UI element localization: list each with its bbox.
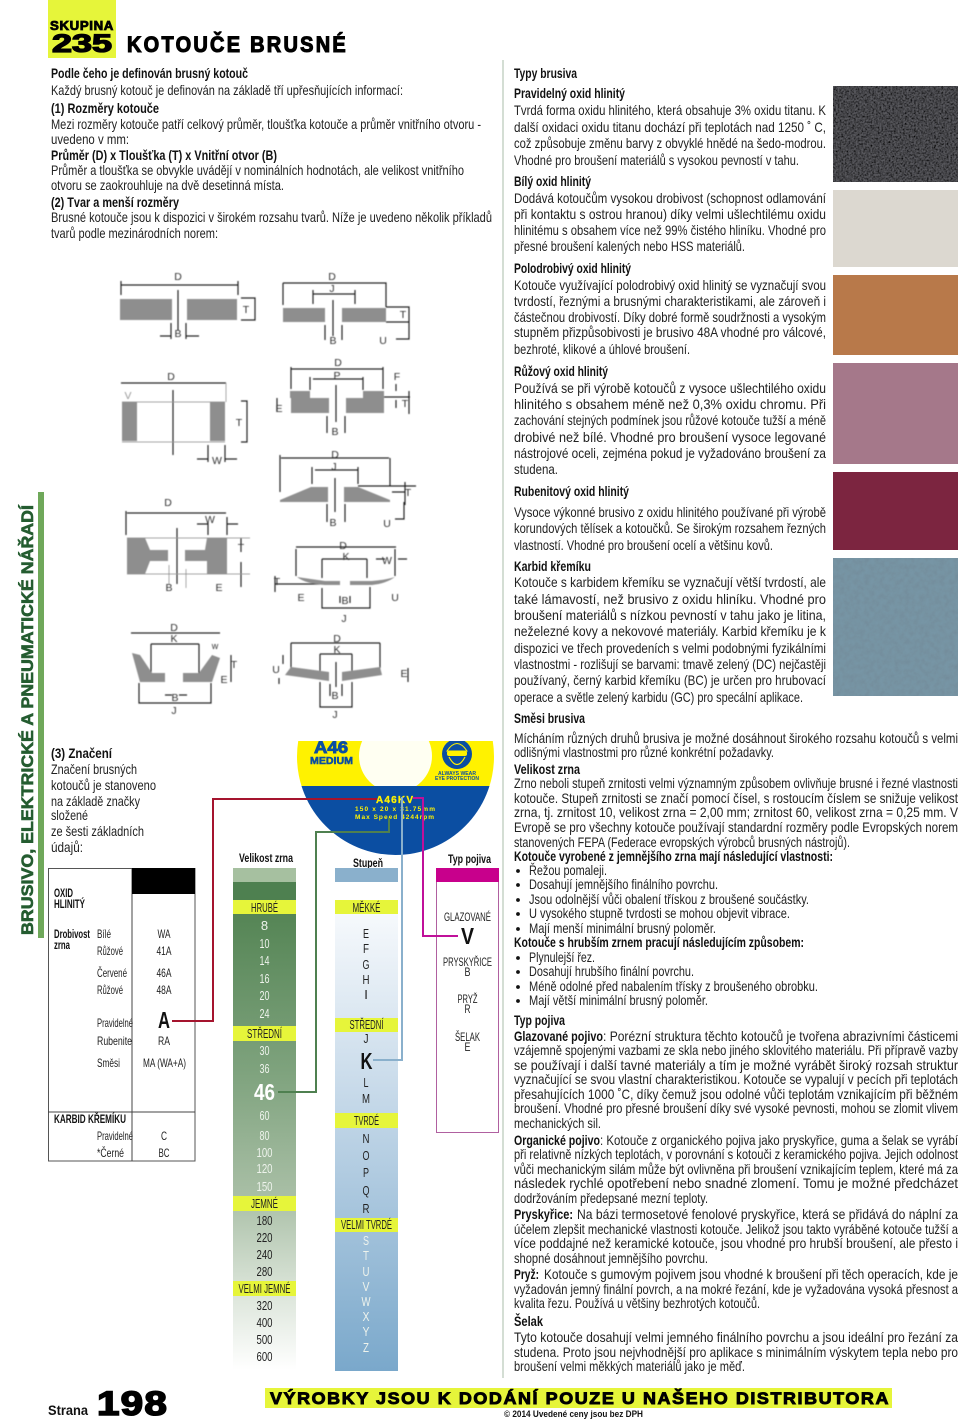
highlighted grade K: K bbox=[360, 1048, 373, 1074]
diagram: flaring cup wheel: T bbox=[231, 659, 238, 671]
text block: definition of a grinding wheel: (2) Tvar a menší rozměry bbox=[51, 194, 179, 210]
paragraph: semi-friable aluminium oxide: bezhroté, klikové a úhlové broušení. bbox=[514, 341, 690, 357]
column: grain size: 120 bbox=[256, 1161, 272, 1176]
column: grain size: 16 bbox=[260, 971, 270, 986]
text block: abrasive types bbox=[514, 65, 827, 705]
paragraph: semi-friable aluminium oxide: Polodrobivý oxid hlinitý bbox=[514, 260, 631, 276]
diagram: tapered wheel bbox=[280, 449, 416, 530]
table: abrasive types: Růžové bbox=[97, 983, 123, 997]
column: grain size: 280 bbox=[256, 1264, 272, 1279]
column: bond type: R bbox=[464, 1002, 471, 1016]
paragraph: regular aluminium oxide: Tvrdá forma oxidu hlinitého, která obsahuje 3% oxidu titanu. K bbox=[514, 102, 827, 118]
column: grade: H bbox=[362, 972, 370, 987]
column: grade: S bbox=[363, 1233, 369, 1248]
diagram: depressed center wheel: K bbox=[333, 644, 341, 656]
text block: definition of a grinding wheel: Každý brusný kotouč je definován na základě tří upřesňujících informací: bbox=[51, 82, 403, 98]
paragraph: shellac bbox=[514, 1312, 958, 1374]
column: grade: L bbox=[364, 1075, 368, 1090]
paragraph: rubenite aluminium oxide: Rubenitový oxid hlinitý bbox=[514, 483, 629, 499]
column: grain size: 240 bbox=[256, 1247, 272, 1262]
column: bond type bbox=[436, 852, 499, 1132]
table: abrasive types: RA bbox=[158, 1034, 170, 1048]
diagram: flaring cup wheel: K bbox=[170, 633, 178, 645]
paragraph: silicon carbide: vlastnostmi - rozlišují se barvami: tmavě zelený (DC) nejčastěji bbox=[514, 656, 826, 672]
column: grain size: HRUBÉ bbox=[251, 900, 278, 915]
paragraph: white aluminium oxide: přesné broušení kalených nebo HSS materiálů. bbox=[514, 238, 745, 254]
table heading: aluminium oxide: HLINITÝ bbox=[54, 896, 85, 911]
table: abrasive types: BC bbox=[158, 1146, 170, 1160]
table: abrasive types: Směsi bbox=[97, 1056, 120, 1070]
diagram: double recessed wheel: D bbox=[164, 497, 172, 509]
disc text: grain designation: A46 bbox=[314, 738, 348, 757]
diagram: double recessed wheel: T bbox=[238, 542, 245, 554]
column: grain size: Velikost zrna bbox=[239, 851, 293, 865]
text block: (3) marking: údajů: bbox=[51, 839, 83, 855]
disc text: specification: Max Speed 4244rpm bbox=[355, 814, 434, 821]
sidebar: vertical section label: BRUSIVO, ELEKTRICKÉ A PNEUMATICKÉ NÁŘADÍ bbox=[18, 504, 37, 935]
diagram: recessed both sides wheel: D bbox=[334, 357, 342, 369]
column: grain size: 600 bbox=[256, 1349, 272, 1364]
column: grade: Stupeň bbox=[353, 856, 383, 870]
text block: definition of a grinding wheel: Mezi rozměry kotouče patří celkový průměr, tloušťka kotouče a průměr vnitřního otvoru - bbox=[51, 116, 481, 132]
column: grain size: 20 bbox=[260, 988, 270, 1003]
disc text: eye protection notice bbox=[435, 771, 479, 782]
text block: definition of a grinding wheel: Průměr a tloušťka se obvykle uvádějí v nominálních hodnotách, ale velikost vnitřního bbox=[51, 162, 464, 178]
paragraph: rubenite aluminium oxide: vlastností. Vhodné pro broušení ocelí a většinu kovů. bbox=[514, 537, 773, 553]
table: abrasive types: Bílé bbox=[97, 927, 111, 941]
list: finer grain properties: Jsou odolnější vůči obalení třískou z broušené součástky. bbox=[529, 891, 809, 907]
connector: grade K to label bbox=[373, 797, 402, 1060]
text block: (3) marking: ze šesti základních bbox=[51, 823, 144, 839]
column: bond type: GLAZOVANÉ bbox=[444, 909, 491, 924]
diagram: dish wheel with flange: K bbox=[342, 551, 350, 563]
text block: (3) marking: složené bbox=[51, 807, 88, 823]
disc text: eye protection notice: ALWAYS WEAR bbox=[438, 771, 476, 777]
paragraph: white aluminium oxide: při kontaktu s ostrou hranou) díky velmi ušlechtilému oxidu bbox=[514, 206, 826, 222]
header: group badge: SKUPINA bbox=[50, 19, 114, 33]
table heading: aluminium oxide: zrna bbox=[54, 938, 70, 952]
text block: (3) marking: na základě značky bbox=[51, 793, 140, 809]
text block: abrasive mixtures: Směsi brusiva bbox=[514, 710, 585, 726]
diagram: recessed wheel: U bbox=[379, 335, 387, 347]
text block: definition of a grinding wheel: tvarů podle mezinárodních norem: bbox=[51, 225, 218, 241]
list: coarser grain properties: Plynulejší řez. bbox=[529, 949, 595, 965]
column: grade: X bbox=[362, 1309, 370, 1324]
diagram: recessed wheel: J bbox=[329, 283, 335, 295]
table: abrasive types bbox=[48, 868, 195, 1161]
list: finer grain properties bbox=[514, 848, 833, 936]
column: grade: N bbox=[362, 1131, 370, 1146]
paragraph: semi-friable aluminium oxide: stupněm přizpůsobivosti je brusivo 48A vhodné pro válcové, bbox=[514, 324, 826, 340]
paragraph: pink aluminium oxide: Používá se při výrobě kotoučů z vysoce ušlechtilého oxidu bbox=[514, 380, 826, 396]
column: bond type: PRYSKYŘICE bbox=[443, 954, 492, 969]
column: grade: Q bbox=[362, 1183, 370, 1198]
paragraph: organic bond: Organické pojivo bbox=[514, 1132, 600, 1148]
diagram: dish wheel with flange: T bbox=[274, 576, 281, 588]
paragraph: vitrified bond: mechanických sil. bbox=[514, 1115, 601, 1131]
sidebar: vertical section label bbox=[18, 492, 44, 938]
diagram: depressed center wheel: E bbox=[400, 668, 408, 680]
list: finer grain properties: Kotouče vyrobené z jemnějšího zrna mají následující vlastnosti: bbox=[514, 848, 833, 864]
column: bond type: E bbox=[464, 1040, 470, 1054]
paragraph: white aluminium oxide bbox=[514, 173, 826, 254]
column: grade: Z bbox=[363, 1340, 369, 1355]
paragraph: pink aluminium oxide bbox=[514, 363, 826, 477]
footer: copyright: © 2014 Uvedené ceny jsou bez DPH bbox=[504, 1409, 643, 1419]
diagram: straight wheel bbox=[120, 271, 255, 340]
column: grade: E bbox=[363, 926, 369, 941]
column: grain size: 10 bbox=[260, 936, 270, 951]
paragraph: silicon carbide: Kotouče s karbidem křemíku se vyznačují větší tvrdostí, ale bbox=[514, 574, 826, 590]
column: grain size: 60 bbox=[260, 1108, 270, 1123]
column: grain size: 150 bbox=[256, 1179, 272, 1194]
text block: definition of a grinding wheel bbox=[51, 65, 492, 241]
paragraph: resin: Pryskyřice: bbox=[514, 1206, 573, 1222]
diagram: flaring cup wheel: w bbox=[211, 641, 219, 651]
heading: abrasive types: Typy brusiva bbox=[514, 65, 577, 81]
highlighted grain value 46: 46 bbox=[254, 1079, 275, 1105]
column: grade: VELMI TVRDÉ bbox=[341, 1217, 392, 1232]
marking letter A: A bbox=[158, 1007, 170, 1033]
paragraph: organic bond bbox=[514, 1132, 958, 1206]
paragraph: pink aluminium oxide: drobivé než bílé. Vhodné pro broušení vysoce legované bbox=[514, 429, 826, 445]
column: grade: J bbox=[364, 1031, 368, 1046]
column: grain size: 36 bbox=[260, 1061, 270, 1076]
text block: (3) marking bbox=[51, 745, 156, 855]
diagram: straight wheel: D bbox=[174, 271, 182, 283]
diagram: cylinder wheel: V bbox=[124, 390, 132, 402]
paragraph: semi-friable aluminium oxide: Kotouče využívající polodrobivý oxid hlinitý se vyznačují svou bbox=[514, 277, 826, 293]
paragraph: pink aluminium oxide: Růžový oxid hlinitý bbox=[514, 363, 608, 379]
table: abrasive types: Pravidelné bbox=[97, 1129, 133, 1143]
connector: bond V to label bbox=[413, 798, 458, 936]
paragraph: resin: shopné dosáhnout jemnějšího povrchu. bbox=[514, 1250, 708, 1266]
diagram: recessed both sides wheel: F bbox=[394, 371, 400, 383]
paragraph: pink aluminium oxide: nástrojové oceli, zejména pokud je vyžadováno broušení za bbox=[514, 445, 826, 461]
list: coarser grain properties: Dosahují hrubšího finální povrchu. bbox=[529, 963, 694, 979]
swatch: pink aluminium oxide bbox=[833, 363, 958, 464]
list: finer grain properties: Řežou pomaleji. bbox=[529, 862, 607, 878]
diagram: cylinder wheel bbox=[121, 371, 247, 467]
disc text: specification: A46KV bbox=[376, 795, 413, 806]
table: abrasive types: Růžové bbox=[97, 944, 123, 958]
paragraph: pink aluminium oxide: hlinitého s obsahem méně než 0,3% oxidu chromu. Při bbox=[514, 396, 826, 412]
paragraph: vitrified bond bbox=[514, 1028, 958, 1131]
table heading: aluminium oxide: OXID bbox=[54, 886, 73, 900]
list: finer grain properties: U vysokého stupně tvrdosti se mohou objevit vibrace. bbox=[529, 905, 790, 921]
column: grain size: 14 bbox=[260, 953, 270, 968]
diagram: recessed wheel bbox=[283, 271, 409, 347]
diagram: flaring cup wheel bbox=[131, 622, 238, 717]
paragraph: white aluminium oxide: Bílý oxid hlinitý bbox=[514, 173, 591, 189]
paragraph: silicon carbide: broušení materiálů s nízkou pevností v tahu jako je litina, bbox=[514, 607, 826, 623]
table heading: aluminium oxide: Drobivost bbox=[54, 927, 90, 941]
column: grade: STŘEDNÍ bbox=[350, 1017, 384, 1032]
list: finer grain properties: Mají menší minimální brusný poloměr. bbox=[529, 920, 716, 936]
highlighted bond V: V bbox=[461, 923, 475, 949]
diagram: cylinder wheel: D bbox=[167, 371, 175, 383]
list: coarser grain properties: Méně odolné před nabalením třísky z broušeného obrobku. bbox=[529, 978, 818, 994]
column: grain size: 100 bbox=[256, 1145, 272, 1160]
diagram: recessed both sides wheel bbox=[275, 357, 410, 438]
paragraph: silicon carbide: také lámavostí, než brusivo z oxidu hliníku. Vhodné pro bbox=[514, 591, 826, 607]
paragraph: silicon carbide: Karbid křemíku bbox=[514, 558, 591, 574]
disc text: grain designation: MEDIUM bbox=[310, 756, 353, 767]
diagram: double recessed wheel: W bbox=[205, 514, 215, 526]
disc text: specification: 150 x 20 x 31.75mm bbox=[355, 806, 435, 813]
diagram: flaring cup wheel: D bbox=[170, 622, 178, 634]
diagram: tapered wheel: T bbox=[405, 487, 412, 499]
diagram: dish wheel with flange: J bbox=[341, 613, 347, 625]
paragraph: pink aluminium oxide: zachování stejných podmínek jsou růžové kotouče tužší a méně bbox=[514, 412, 826, 428]
diagram: flaring cup wheel: B bbox=[171, 692, 179, 704]
text block: grain size bbox=[514, 761, 959, 1008]
column: grade: Y bbox=[362, 1324, 370, 1339]
diagram: dish wheel with flange: U bbox=[391, 592, 399, 604]
diagram: tapered wheel: D bbox=[331, 449, 339, 461]
column: grain size: 24 bbox=[260, 1006, 270, 1021]
text block: grain size: stanovených FEPA (Federace evropských výrobců brusných nástrojů). bbox=[514, 834, 850, 850]
paragraph: rubber: kvalita řezu. Používá u většiny bezhrotých kotoučů. bbox=[514, 1295, 760, 1311]
paragraph: semi-friable aluminium oxide: tvrdostí, řeznými a brusnými charakteristikami, ale zároveň i bbox=[514, 293, 826, 309]
diagram: depressed center wheel: U bbox=[272, 664, 280, 676]
abrasive colour swatches bbox=[833, 86, 958, 696]
table: abrasive types: C bbox=[161, 1129, 167, 1143]
diagram: depressed center wheel: J bbox=[332, 709, 338, 721]
footer: page number: Strana bbox=[48, 1402, 88, 1418]
column: grain size: JEMNÉ bbox=[251, 1196, 278, 1211]
column divider bbox=[502, 60, 504, 1378]
column: grade bbox=[335, 856, 398, 1371]
column: grain size: 8 bbox=[261, 918, 268, 933]
paragraph: silicon carbide: neželezné kovy a nekovové materiály. Karbid křemíku je k bbox=[514, 623, 827, 639]
diagram: flaring cup wheel: J bbox=[171, 705, 177, 717]
swatch: silicon carbide bbox=[833, 558, 958, 696]
text block: bond types: Typ pojiva bbox=[514, 1012, 565, 1028]
swatch: semi-friable aluminium oxide bbox=[833, 275, 958, 355]
column: grain size: 80 bbox=[260, 1128, 270, 1143]
column: grade: T bbox=[363, 1248, 369, 1263]
column: grain size: 180 bbox=[256, 1213, 272, 1228]
wheel label disc bbox=[297, 741, 494, 855]
column: grain size: 220 bbox=[256, 1230, 272, 1245]
paragraph: white aluminium oxide: hlinitému s obsahem více než 99% čistého hliníku. Vhodné pro bbox=[514, 222, 826, 238]
diagram: recessed wheel: T bbox=[400, 309, 407, 321]
column: bond type: B bbox=[464, 965, 470, 979]
text block: (3) marking: (3) Značení bbox=[51, 745, 113, 761]
table: abrasive types: 46A bbox=[156, 966, 172, 980]
table: abrasive types: 48A bbox=[156, 983, 172, 997]
diagram: depressed center wheel bbox=[272, 633, 408, 721]
paragraph: rubber bbox=[514, 1266, 958, 1311]
column: grain size: 30 bbox=[260, 1043, 270, 1058]
diagram: straight wheel: T bbox=[243, 304, 250, 316]
list: coarser grain properties bbox=[514, 934, 818, 1008]
column: grain size bbox=[233, 851, 296, 1370]
footer: page number bbox=[48, 1385, 168, 1420]
disc text: eye protection notice: EYE PROTECTION bbox=[435, 776, 479, 782]
text block: definition of a grinding wheel: (1) Rozměry kotouče bbox=[51, 100, 159, 116]
header: group badge bbox=[48, 0, 116, 58]
diagram: double recessed wheel: B bbox=[165, 582, 173, 594]
paragraph: organic bond: dodržováním předepsané mezní teploty. bbox=[514, 1190, 708, 1206]
diagram: double recessed wheel: E bbox=[215, 582, 223, 594]
title: KOTOUČE BRUSNÉ bbox=[127, 32, 348, 57]
diagram: recessed wheel: D bbox=[328, 271, 336, 283]
table: abrasive types: WA bbox=[158, 927, 170, 941]
footer: distributor banner: VÝROBKY JSOU K DODÁNÍ POUZE U NAŠEHO DISTRIBUTORA bbox=[270, 1389, 890, 1408]
paragraph: regular aluminium oxide: Vhodné pro broušení materiálů s vysokou pevností v tahu. bbox=[514, 152, 799, 168]
connector: grain 46 to label bbox=[278, 818, 389, 1092]
column: bond type: Typ pojiva bbox=[448, 852, 491, 866]
text block: abrasive mixtures: odlišnými vlastnostmi pro různé konkrétní požadavky. bbox=[514, 744, 774, 760]
text block: definition of a grinding wheel: otvoru se zaokrouhluje na dvě desetinná místa. bbox=[51, 177, 284, 193]
swatch: regular aluminium oxide bbox=[833, 86, 958, 182]
text block: bond types bbox=[514, 1012, 958, 1374]
diagram: tapered wheel: U bbox=[383, 518, 391, 530]
header: group badge: 235 bbox=[52, 30, 112, 58]
text block: definition of a grinding wheel: uvedeno v mm: bbox=[51, 131, 129, 147]
disc text: grain designation bbox=[310, 738, 353, 767]
diagram: recessed both sides wheel: E bbox=[275, 403, 283, 415]
list: coarser grain properties: Mají větší minimální brusný poloměr. bbox=[529, 992, 708, 1008]
diagram: tapered wheel: J bbox=[331, 461, 337, 473]
text block: definition of a grinding wheel: Brusné kotouče jsou k dispozici v širokém rozsahu tvarů. Níže je uvedeno několik příkladů bbox=[51, 209, 492, 225]
text block: abrasive mixtures bbox=[514, 710, 958, 760]
column: grade: MĚKKÉ bbox=[352, 900, 381, 915]
column: bond type: ŠELAK bbox=[455, 1029, 480, 1044]
paragraph: regular aluminium oxide: další oxidaci oxidu titanu dochází při teplotách nad 1250 ˚ C, bbox=[514, 119, 826, 135]
text block: grain size: Velikost zrna bbox=[514, 761, 580, 777]
diagram: dish wheel with flange: D bbox=[339, 540, 347, 552]
table: abrasive types: MA (WA+A) bbox=[143, 1056, 186, 1070]
connector: abrasive A to label bbox=[172, 799, 377, 1021]
diagram: recessed both sides wheel: T bbox=[402, 398, 409, 410]
table: abrasive types: Pravidelné bbox=[97, 1016, 133, 1030]
diagram: depressed center wheel: B bbox=[331, 690, 339, 702]
paragraph: shellac: Šelak bbox=[514, 1312, 543, 1329]
text block: (3) marking: kotoučů je stanoveno bbox=[51, 777, 156, 793]
text block: (3) marking: Značení brusných bbox=[51, 761, 137, 777]
paragraph: regular aluminium oxide: Pravidelný oxid hlinitý bbox=[514, 85, 625, 101]
table: abrasive types: Rubenite bbox=[97, 1034, 132, 1048]
paragraph: rubenite aluminium oxide bbox=[514, 483, 826, 553]
diagram: dish wheel with flange: B bbox=[341, 595, 349, 607]
icon: safety goggles bbox=[442, 739, 472, 769]
table: abrasive types: 41A bbox=[156, 944, 172, 958]
column: grade: V bbox=[362, 1279, 370, 1294]
paragraph: shellac: broušení velmi měkkých materiálů jako je měď. bbox=[514, 1358, 745, 1374]
column: grade: O bbox=[362, 1148, 370, 1163]
column: grade: F bbox=[363, 941, 369, 956]
diagram: recessed both sides wheel: P bbox=[333, 370, 341, 382]
paragraph: vitrified bond: Glazované pojivo bbox=[514, 1028, 603, 1044]
diagram: dish wheel with flange bbox=[274, 540, 407, 625]
table: abrasive types: Červené bbox=[97, 965, 127, 980]
wheel shape diagrams bbox=[120, 271, 416, 721]
column: grade: I bbox=[364, 987, 368, 1002]
column: grain size: 320 bbox=[256, 1298, 272, 1313]
paragraph: silicon carbide bbox=[514, 558, 827, 705]
column: grade: U bbox=[362, 1264, 370, 1279]
table: abrasive types: *Černé bbox=[97, 1145, 124, 1160]
column: grain size: STŘEDNÍ bbox=[247, 1026, 282, 1041]
paragraph: silicon carbide: operace a světle zelený karbidu (GC) pro specální aplikace. bbox=[514, 689, 803, 705]
column: bond type: PRYŽ bbox=[458, 991, 478, 1006]
paragraph: rubenite aluminium oxide: Vysoce výkonné brusivo z oxidu hlinitého používané při výrobě bbox=[514, 504, 826, 520]
list: finer grain properties: Dosahují jemnějšího finálního povrchu. bbox=[529, 876, 718, 892]
paragraph: silicon carbide: dispozici ve třech provedeních s velmi podobnými fyzikálními bbox=[514, 640, 826, 656]
disc text: specification bbox=[355, 795, 435, 821]
paragraph: pink aluminium oxide: studena. bbox=[514, 461, 558, 477]
table heading: aluminium oxide bbox=[54, 886, 90, 952]
column: grade: P bbox=[363, 1165, 369, 1180]
list: coarser grain properties: Kotouče s hrubším zrnem pracují následujícím způsobem: bbox=[514, 934, 804, 950]
column: grain size: 500 bbox=[256, 1332, 272, 1347]
text block: definition of a grinding wheel: Průměr (D) x Tloušťka (T) x Vnitřní otvor (B) bbox=[51, 147, 277, 163]
column: grain size: VELMI JEMNÉ bbox=[238, 1281, 291, 1296]
paragraph: regular aluminium oxide: což způsobuje změnu barvy z obvyklé hnědé na šedo-modrou. bbox=[514, 135, 826, 151]
column: grain size: 400 bbox=[256, 1315, 272, 1330]
text block: definition of a grinding wheel: Podle čeho je definován brusný kotouč bbox=[51, 65, 248, 81]
paragraph: semi-friable aluminium oxide: částečnou drobivostí. Díky dobré formě soudržnosti a vysokým bbox=[514, 309, 826, 325]
paragraph: regular aluminium oxide bbox=[514, 85, 827, 168]
diagram: recessed wheel: B bbox=[329, 335, 337, 347]
swatch: white aluminium oxide bbox=[833, 190, 958, 267]
column: grade: M bbox=[362, 1091, 370, 1106]
swatch: rubenite aluminium oxide bbox=[833, 472, 958, 550]
diagram: straight wheel: B bbox=[174, 328, 182, 340]
paragraph: rubber: Pryž: bbox=[514, 1266, 539, 1282]
diagram: double recessed wheel bbox=[126, 497, 250, 594]
diagram: flaring cup wheel: E bbox=[220, 674, 228, 686]
diagram: dish wheel with flange: E bbox=[297, 592, 305, 604]
diagram: cylinder wheel: T bbox=[236, 417, 243, 429]
column: grade: R bbox=[362, 1201, 370, 1216]
diagram: cylinder wheel: W bbox=[212, 455, 222, 467]
diagram: depressed center wheel: D bbox=[333, 633, 341, 645]
column: grade: W bbox=[362, 1294, 371, 1309]
paragraph: rubenite aluminium oxide: korundových tělísek a kotoučků. Se širokým rozsahem řezných bbox=[514, 520, 826, 536]
diagram: recessed both sides wheel: B bbox=[331, 426, 339, 438]
diagram: dish wheel with flange: W bbox=[382, 555, 392, 567]
paragraph: white aluminium oxide: Dodává kotoučům vysokou drobivost (schopnost odlamování bbox=[514, 190, 826, 206]
table heading: silicon carbide: KARBID KŘEMÍKU bbox=[54, 1111, 126, 1126]
diagram: tapered wheel: B bbox=[329, 517, 337, 529]
paragraph: resin bbox=[514, 1206, 958, 1266]
paragraph: silicon carbide: používaný, černý karbid křemíku (BC) je určen pro hrubovací bbox=[514, 672, 826, 688]
column: grade: G bbox=[362, 957, 370, 972]
paragraph: semi-friable aluminium oxide bbox=[514, 260, 826, 357]
column: grade: TVRDÉ bbox=[354, 1113, 379, 1128]
